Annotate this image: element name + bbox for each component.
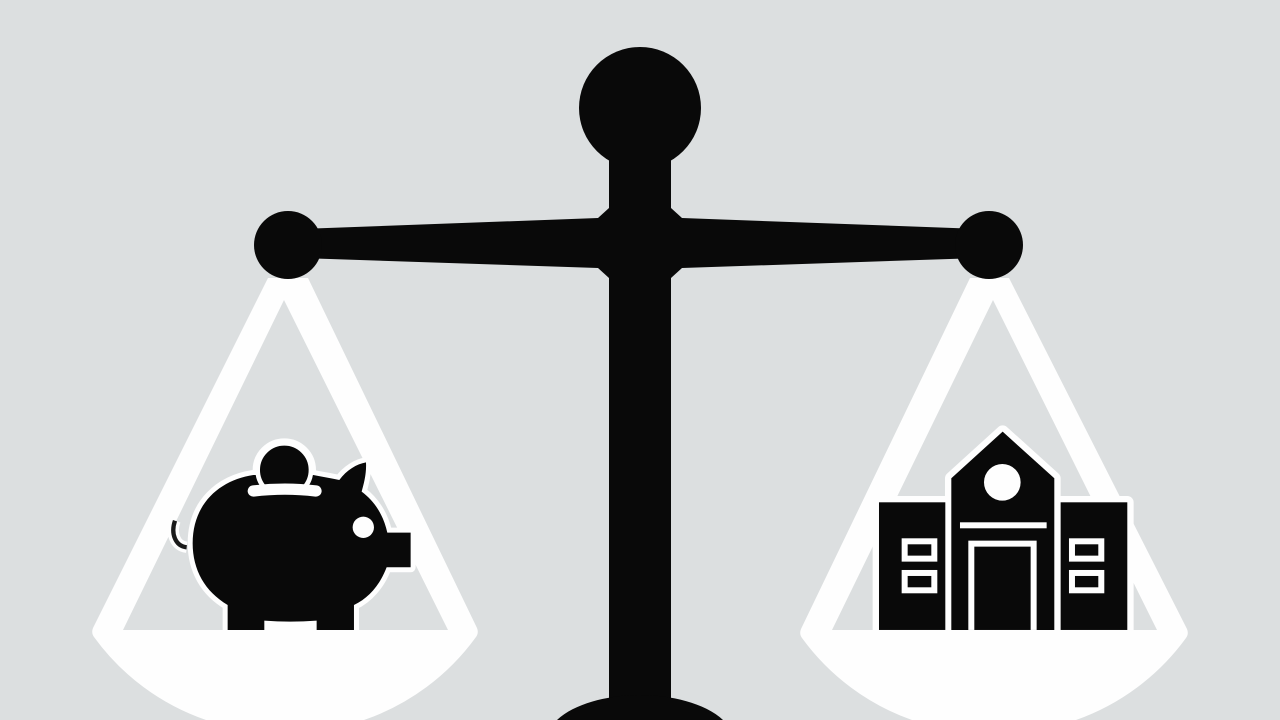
lintel	[960, 522, 1047, 528]
icon: piggy bank	[173, 443, 411, 630]
pig tail	[173, 521, 187, 547]
left scale pan with straps	[92, 278, 478, 720]
pig halo	[193, 443, 411, 630]
central post	[609, 150, 671, 710]
pig tail halo	[173, 521, 187, 547]
round window	[984, 464, 1021, 501]
beam	[300, 208, 980, 278]
door	[974, 547, 1031, 630]
left wing	[879, 502, 945, 630]
door frame	[968, 541, 1037, 630]
pig body	[193, 462, 411, 630]
left windows	[905, 541, 934, 590]
top knob	[579, 47, 701, 169]
right beam end	[955, 211, 1023, 279]
right wing	[1061, 502, 1127, 630]
right scale pan with straps	[800, 278, 1188, 720]
coin slot	[253, 489, 316, 491]
central tower	[951, 432, 1054, 630]
coin	[258, 443, 311, 488]
left beam end	[254, 211, 322, 279]
pig eye	[353, 517, 374, 538]
right windows	[1072, 541, 1101, 590]
icon: bank building	[879, 432, 1127, 630]
scale stand	[254, 47, 1023, 720]
building halo	[879, 432, 1127, 630]
base dome	[557, 695, 723, 720]
